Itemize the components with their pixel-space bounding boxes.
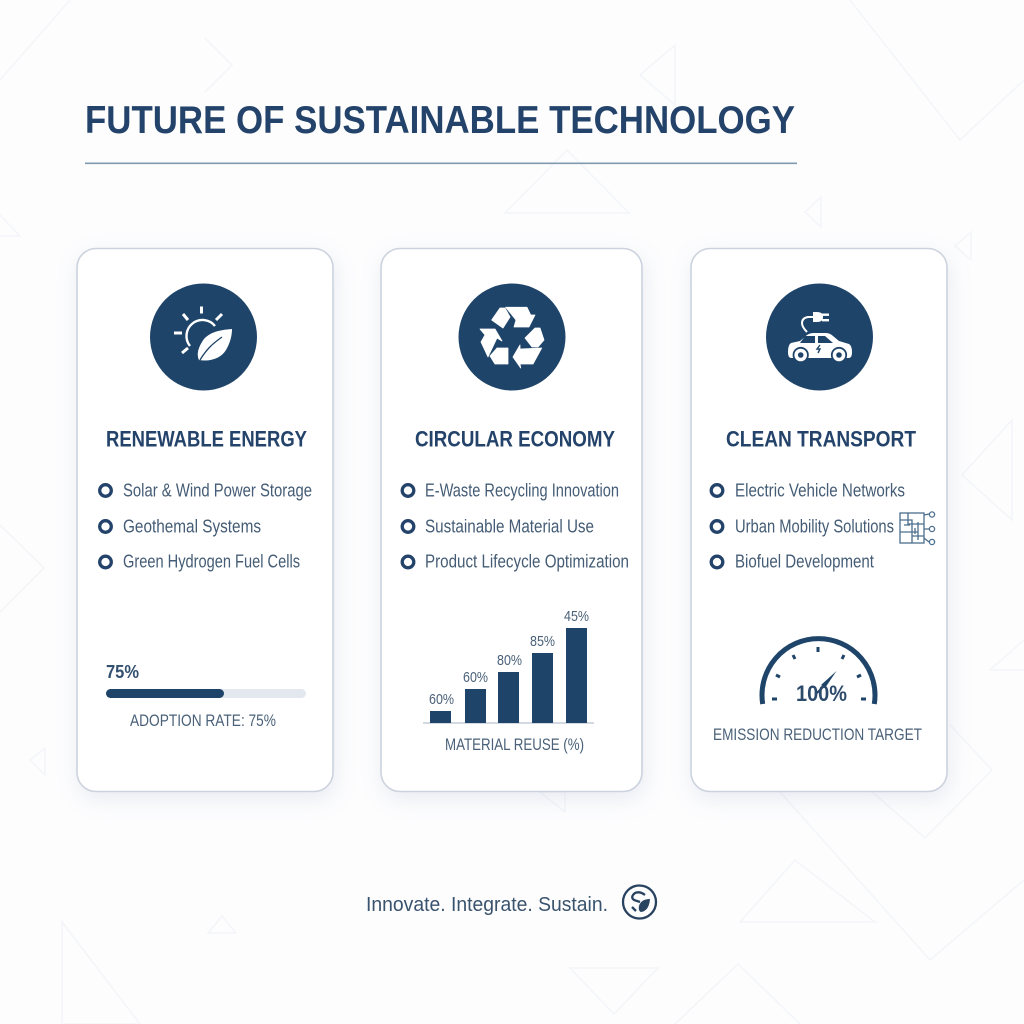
list: renewable energy items: Green Hydrogen Fuel Cells [123, 552, 300, 572]
heading: renewable energy: RENEWABLE ENERGY [106, 426, 307, 452]
bar chart: material reuse: 60% [429, 691, 454, 708]
progress bar: adoption rate [106, 662, 306, 730]
bar chart: material reuse: 45% [564, 608, 589, 625]
list: circular economy items: Product Lifecycle Optimization [425, 552, 629, 572]
bar chart: material reuse: 60% [463, 669, 488, 686]
bar chart: material reuse: 85% [530, 633, 555, 650]
heading: clean transport: CLEAN TRANSPORT [726, 426, 916, 452]
panel: renewable energy [77, 248, 333, 792]
icon: sustain logo [623, 886, 656, 918]
bar chart: material reuse [423, 608, 594, 754]
icon: electric car [766, 284, 873, 390]
tagline: Innovate. Integrate. Sustain. [366, 894, 608, 916]
panel: circular economy [381, 248, 642, 792]
bar chart: material reuse: MATERIAL REUSE (%) [445, 736, 584, 754]
gauge: emission reduction: EMISSION REDUCTION TARGET [713, 726, 922, 744]
list: clean transport items: Biofuel Development [735, 552, 874, 572]
icon: recycling symbol [458, 284, 566, 390]
bar chart: material reuse: 80% [497, 652, 522, 669]
list: renewable energy items: Solar & Wind Power Storage [123, 480, 312, 500]
list: clean transport items [711, 480, 905, 572]
heading: circular economy: CIRCULAR ECONOMY [415, 426, 615, 452]
progress bar: adoption rate: ADOPTION RATE: 75% [130, 712, 276, 730]
list: circular economy items: E-Waste Recycling Innovation [425, 480, 619, 500]
list: renewable energy items [100, 480, 312, 572]
gauge: emission reduction [713, 639, 922, 744]
list: renewable energy items: Geothemal Systems [123, 516, 261, 536]
title: FUTURE OF SUSTAINABLE TECHNOLOGY [85, 99, 795, 142]
panel: clean transport [691, 248, 947, 792]
icon: sun and leaf [150, 284, 257, 390]
list: circular economy items [402, 480, 629, 572]
list: circular economy items: Sustainable Material Use [425, 516, 594, 536]
icon: circuit blueprint [900, 512, 935, 545]
gauge: emission reduction: 100% [796, 681, 847, 706]
list: clean transport items: Urban Mobility Solutions [735, 516, 894, 536]
progress bar: adoption rate: 75% [106, 662, 139, 682]
list: clean transport items: Electric Vehicle Networks [735, 480, 905, 500]
